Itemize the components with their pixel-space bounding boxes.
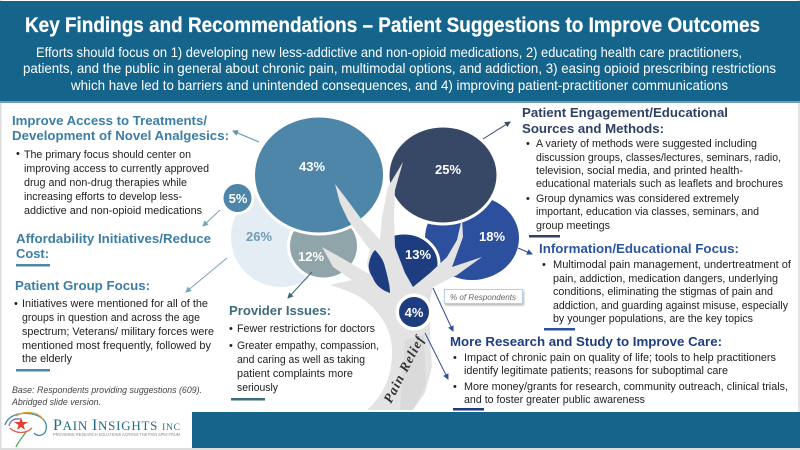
icon: swirl and star (5, 412, 46, 447)
body text: discussion groups, classes/lectures, seminars, radio, (536, 152, 781, 164)
body text: drug and non-drug therapies while (24, 177, 187, 189)
heading: Information/Educational Focus: (539, 241, 739, 256)
body text: groups in question and across the age (22, 312, 200, 324)
body text: the elderly (22, 353, 72, 365)
body text: More money/grants for research, community outreach, clinical trials, (464, 381, 788, 393)
panel: more research (450, 334, 788, 410)
panel: provider issues (229, 303, 379, 400)
logo wordmark: PAIN INSIGHTS INC (53, 417, 180, 434)
body text: important, education via classes, seminars, and (536, 206, 759, 218)
body text: A variety of methods were suggested including (536, 138, 757, 150)
header summary text: patients, and the public in general about chronic pain, multimodal options, and addiction, 3) easing opioid prescribing restrictions (23, 60, 776, 76)
tree trunk and branches (322, 162, 482, 410)
body text: improving access to currently approved (24, 163, 209, 175)
body text: addictive and non-opioid medications (24, 205, 202, 217)
arrow: 26% to patient group (186, 258, 227, 292)
body text: spectrum; Veterans/ military forces were (22, 326, 214, 338)
body text: and to foster greater public awareness (464, 394, 645, 406)
base note (11, 385, 202, 408)
body text: Group dynamics was considered extremely (536, 193, 739, 205)
bubble: 13% (369, 233, 439, 295)
body text (229, 323, 379, 394)
body text: seriously (237, 382, 278, 394)
arrow: 5% to affordability (203, 210, 220, 226)
body text: mentioned most frequently, followed by (22, 340, 211, 352)
bubble labels: 18% (479, 229, 505, 244)
body text: identify legitimate patients; reasons for suboptimal care (464, 365, 728, 377)
body text: • (16, 148, 20, 160)
header summary text (23, 44, 776, 93)
bubble: 4%: 4% (405, 305, 424, 320)
bubble labels: 43% (299, 159, 325, 174)
bubble labels: 5% (229, 191, 248, 206)
base note: Abridged slide version. (11, 397, 101, 408)
trunk label: Pain Relief (380, 332, 427, 405)
bubble labels: 25% (435, 162, 461, 177)
bubble: 18% (425, 196, 519, 280)
heading: Cost: (16, 246, 49, 261)
panel: patient group focus (14, 278, 214, 372)
legend: % of respondents (444, 290, 522, 304)
heading: More Research and Study to Improve Care: (450, 334, 722, 349)
body text: • (229, 340, 233, 352)
body text: Fewer restrictions for doctors (237, 323, 375, 335)
bubble: 26% (231, 187, 331, 287)
heading: Improve Access to Treatments/ (12, 113, 207, 128)
body text (542, 259, 792, 325)
panel: information focus (539, 241, 792, 330)
heading: Sources and Methods: (522, 121, 664, 136)
body text: Greater empathy, compassion, (237, 340, 379, 352)
body text: • (14, 298, 18, 310)
body text: patient complaints more (237, 368, 353, 380)
bubble labels: 13% (405, 247, 431, 262)
body text: • (453, 352, 457, 364)
13% left lobe (369, 250, 390, 293)
body text: increasing efforts to develop less- (24, 191, 182, 203)
heading: Affordability Initiatives/Reduce (16, 231, 211, 246)
body text (526, 138, 783, 232)
panel: affordability (16, 231, 211, 266)
bottom band (192, 412, 800, 448)
body text: • (526, 193, 530, 205)
heading (16, 231, 211, 261)
heading: Patient Engagement/Educational (522, 105, 728, 120)
arrow: 13% to research (433, 288, 453, 331)
arrow: 25% to engagement (483, 122, 510, 139)
body text: The primary focus should center on (24, 149, 191, 161)
arrow: 4% to research (425, 333, 448, 379)
body text: Initiatives were mentioned for all of the (22, 298, 208, 310)
bubble: 26%: 26% (246, 229, 272, 244)
bubble: 25% (388, 126, 498, 224)
body text (16, 148, 209, 217)
body text: • (542, 259, 546, 271)
body text: conditions, eliminating the stigmas of pain and (553, 286, 773, 298)
heading: Provider Issues: (229, 303, 331, 318)
bubble: 4% (396, 294, 432, 330)
legend: % of respondents: % of Respondents (450, 292, 517, 302)
body text (14, 298, 214, 365)
body text: addiction, and guarding against misuse, especially (553, 300, 788, 312)
bubble labels: 12% (298, 249, 324, 264)
bubble: 5% (222, 182, 253, 214)
logo tagline: PROVIDING RESEARCH SOLUTIONS ACROSS THE PAIN SPECTRUM (53, 432, 180, 437)
bubble: 12% (288, 213, 358, 279)
body text: Impact of chronic pain on quality of life; tools to help practitioners (464, 352, 776, 364)
arrow: 12% to provider (288, 272, 312, 298)
header summary text: which have led to barriers and unintended consequences, and 4) improving patient-practitioner communications (70, 77, 728, 93)
body text: • (526, 138, 530, 150)
base note: Base: Respondents providing suggestions (609). (12, 385, 202, 396)
body text: Multimodal pain management, undertreatment of (553, 259, 792, 271)
bubble labels (229, 159, 505, 264)
body text: • (453, 381, 457, 393)
tree bubble chart (222, 116, 519, 410)
arrow: 43% to access (233, 131, 259, 142)
body text: by younger populations, are the key topics (553, 313, 753, 325)
body text (453, 352, 788, 406)
bubble: 43% (254, 116, 384, 234)
body text: group meetings (536, 220, 610, 232)
trunk shading (400, 335, 426, 410)
heading (12, 113, 229, 143)
arrow: 18% to information (518, 248, 532, 254)
header summary text: Efforts should focus on 1) developing new less-addictive and non-opioid medications, 2) educating health care practitioners, (36, 44, 742, 60)
arrows (186, 122, 532, 379)
heading: Development of Novel Analgesics: (12, 128, 229, 143)
panel: patient engagement (522, 105, 783, 238)
heading (522, 105, 728, 136)
body text: educational materials such as leaflets and brochures (536, 178, 783, 190)
body text: pain, addiction, medication dangers, underlying (553, 273, 778, 285)
body text: • (229, 323, 233, 335)
panel: improve access (12, 113, 229, 217)
header banner (0, 1, 800, 103)
heading: Patient Group Focus: (15, 278, 150, 293)
body text: and caring as well as taking (237, 354, 365, 366)
logo: Pain Insights (5, 412, 180, 447)
body text: television, social media, and printed health- (536, 165, 743, 177)
